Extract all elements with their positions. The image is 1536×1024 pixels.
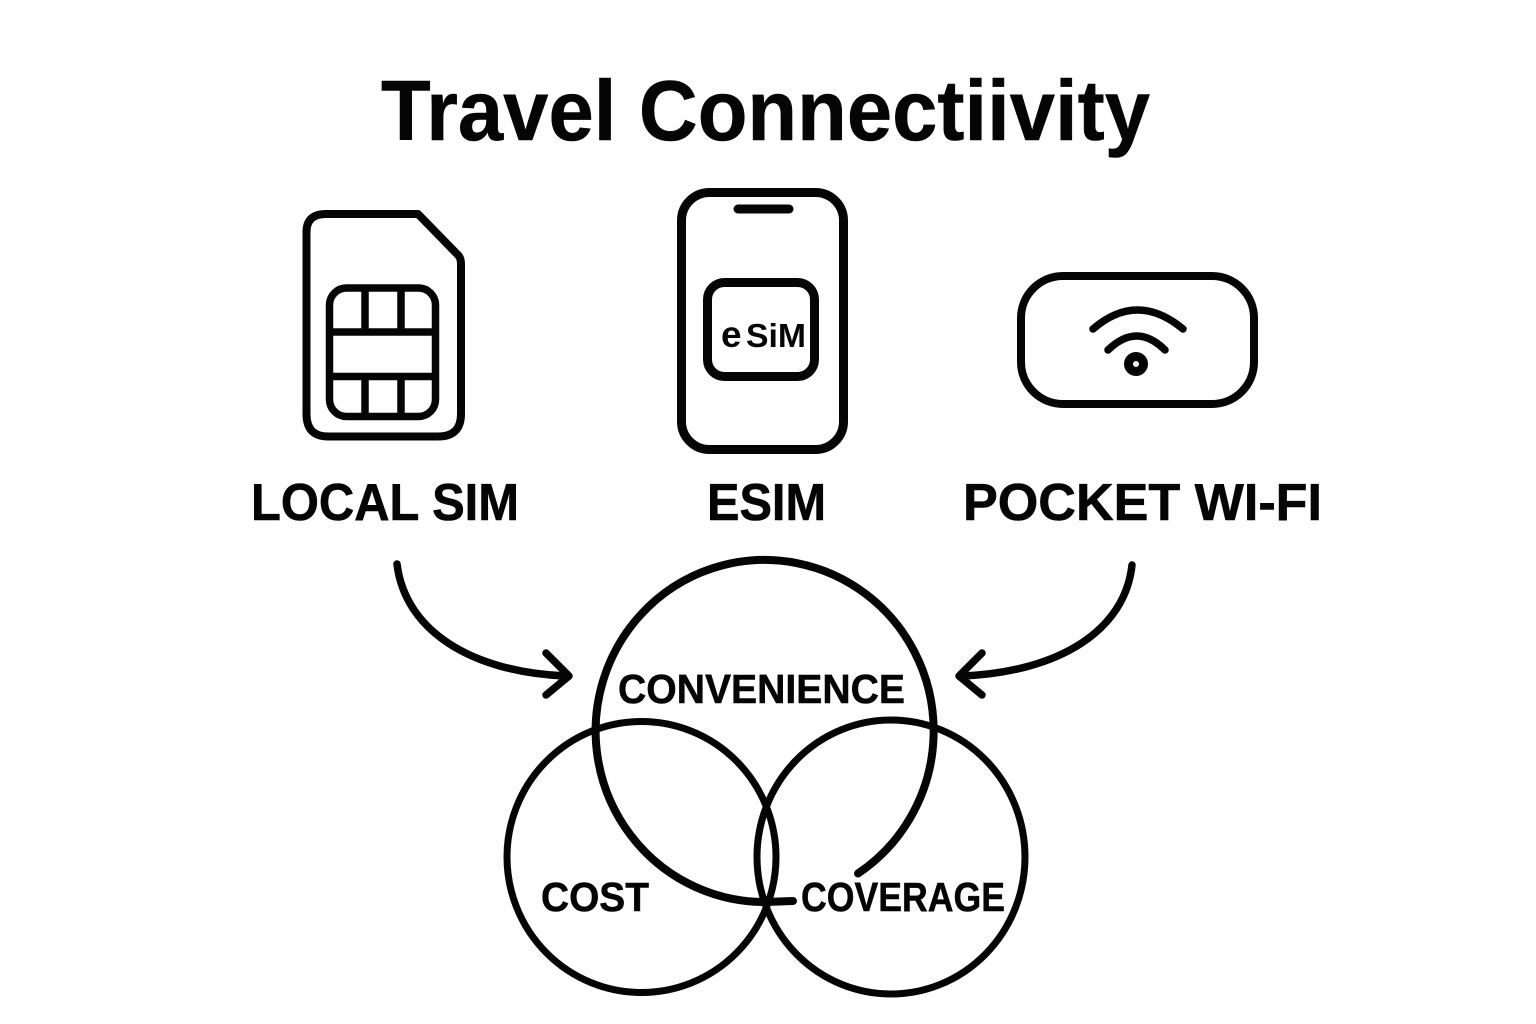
label: local SIM: LOCAL SIM — [251, 474, 519, 532]
circle: coverage — [757, 720, 1025, 994]
icon: pocket Wi-Fi router — [1021, 276, 1254, 404]
label: eSIM: ESIM — [707, 474, 826, 532]
label: cost: COST — [541, 874, 649, 920]
circle: convenience — [596, 560, 934, 902]
Venn diagram — [507, 560, 1025, 994]
circle: cost — [507, 722, 776, 992]
arrow: pocket Wi-Fi to Venn diagram — [959, 565, 1132, 695]
icon: eSIM phone: SiM — [746, 317, 806, 354]
icon: eSIM phone: e — [721, 314, 742, 355]
title: Travel Connectiivity — [381, 64, 1150, 159]
icon: local SIM card — [306, 214, 461, 436]
arrow: local SIM to Venn diagram — [397, 564, 569, 695]
label: convenience: CONVENIENCE — [618, 666, 905, 712]
label: coverage: COVERAGE — [801, 874, 1005, 920]
label: pocket Wi-Fi: POCKET WI-FI — [963, 474, 1322, 532]
icon: eSIM phone — [682, 192, 844, 450]
